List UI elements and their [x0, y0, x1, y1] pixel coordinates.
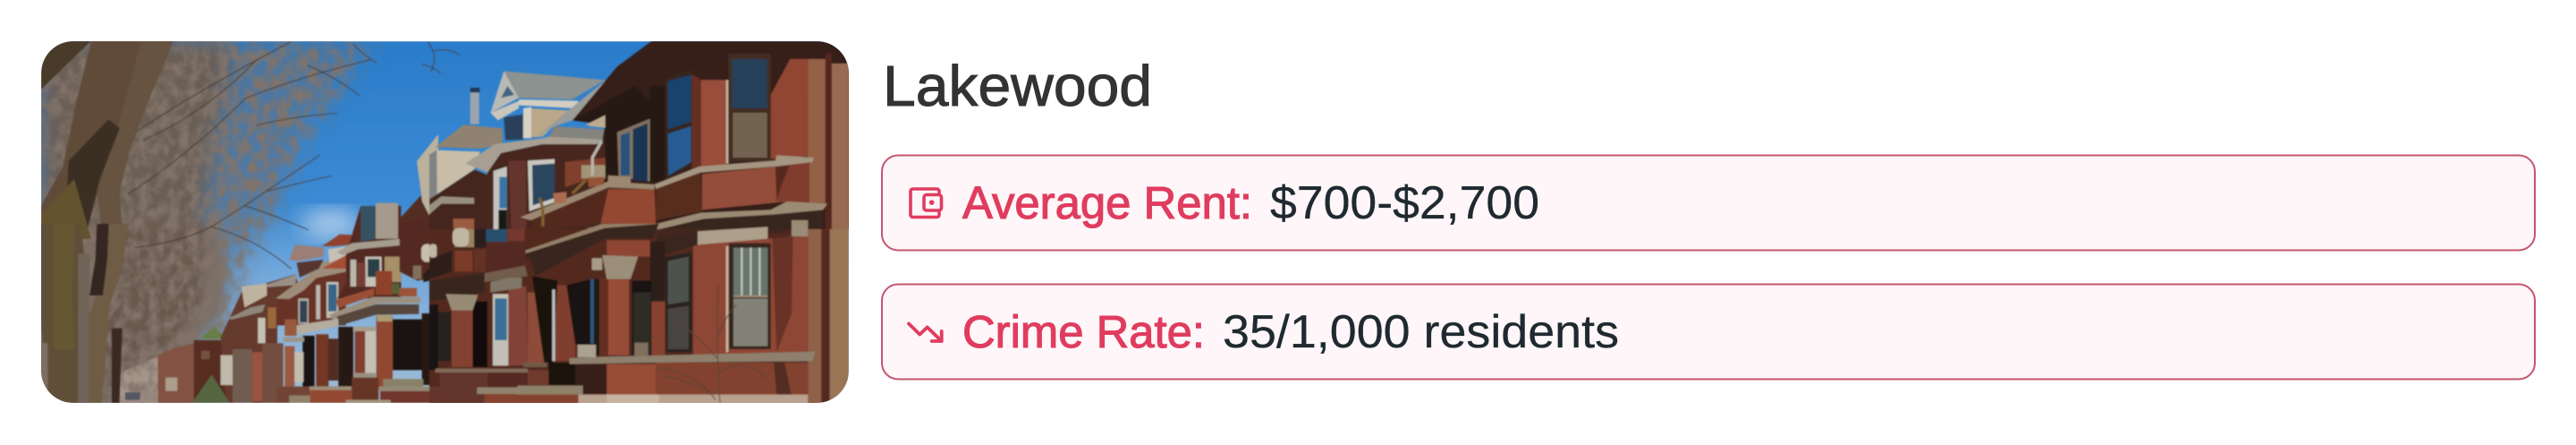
balcony	[532, 187, 608, 229]
sky	[41, 41, 849, 403]
value: crime figure: 35/1,000 residents	[1223, 306, 1619, 358]
upper right of section	[399, 224, 430, 281]
photo: brick apartment row and bare trees	[36, 41, 852, 404]
far brick house	[158, 343, 194, 403]
upper windows	[726, 80, 728, 164]
shrub branches	[656, 284, 767, 403]
upper bay section	[429, 41, 852, 229]
house 4	[337, 206, 401, 298]
icon: trending down arrow	[909, 324, 942, 341]
right bay brick	[700, 80, 726, 169]
panel: average rent	[882, 156, 2535, 251]
main dark mass	[572, 41, 852, 229]
house 3	[277, 257, 346, 325]
main branches	[128, 41, 459, 269]
porch	[329, 295, 421, 321]
porch	[632, 280, 651, 355]
left porch	[429, 251, 452, 279]
evergreen	[192, 374, 230, 403]
label: average rent: Average Rent:	[962, 177, 1252, 228]
walls and cornices	[656, 173, 702, 220]
upper trunks	[41, 41, 174, 242]
value: rent range: $700-$2,700	[1270, 177, 1539, 229]
pale cloud	[302, 210, 360, 238]
planters	[335, 288, 374, 308]
house 2	[221, 275, 298, 403]
twig texture	[41, 41, 417, 403]
lower-left street section	[125, 203, 438, 404]
panel: crime rate	[882, 285, 2535, 380]
base ledges	[575, 364, 606, 394]
lower tree background	[36, 224, 226, 403]
lower bay section	[429, 224, 849, 404]
label: crime rate: Crime Rate:	[962, 306, 1205, 357]
title: Lakewood	[883, 54, 1152, 118]
tree canopy haze	[41, 41, 358, 403]
far house tops	[400, 195, 430, 224]
icon: wallet	[911, 189, 941, 217]
lower trunks	[40, 224, 128, 403]
